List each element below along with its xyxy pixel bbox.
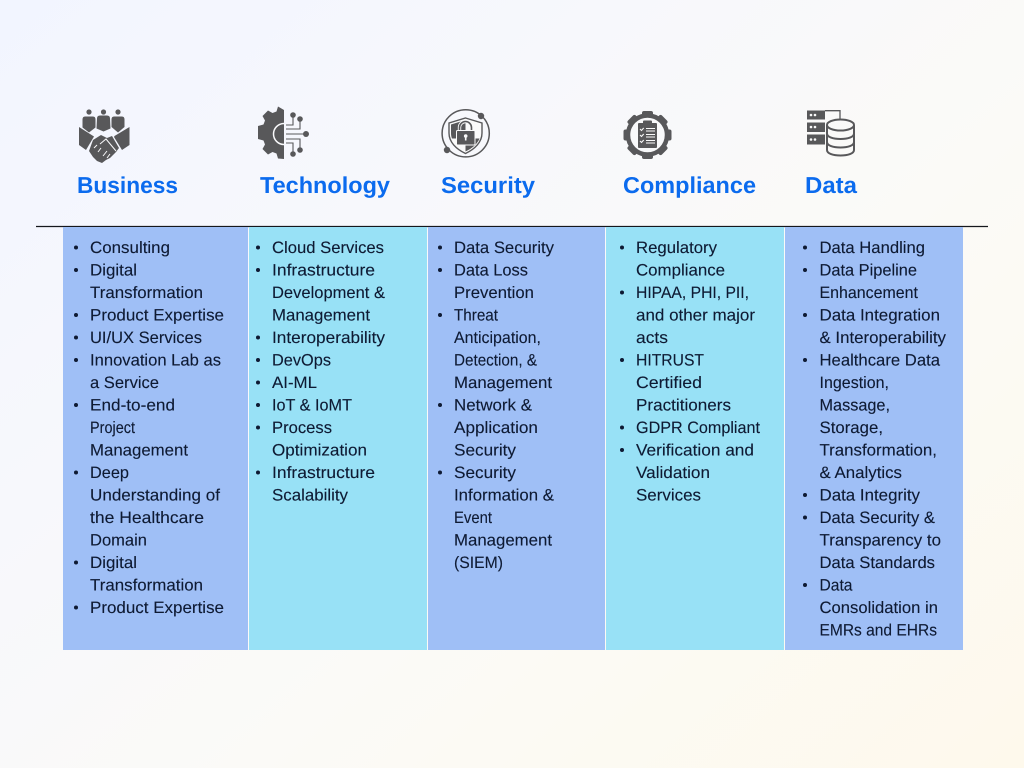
- heading: Compliance: Compliance: [623, 172, 756, 198]
- list: Business: Innovation Lab as: [90, 352, 221, 370]
- list: Compliance: and other major: [636, 306, 756, 324]
- icon: business handshake: [79, 109, 130, 163]
- list: Data: EMRs and EHRs: [820, 622, 937, 640]
- list: Security: Event: [454, 509, 492, 527]
- list: Compliance: HITRUST: [636, 352, 704, 370]
- list: Technology: Interoperability: [272, 329, 386, 347]
- icon: compliance gear with checklist: [624, 111, 672, 159]
- list: Business: Digital: [90, 554, 137, 572]
- list: Security: Network &: [454, 396, 532, 414]
- list: Technology: Management: [272, 306, 370, 324]
- list: Security: Application: [454, 419, 538, 437]
- icon: data servers and database: [807, 110, 854, 156]
- list: Business: [74, 239, 224, 617]
- list: Compliance: Services: [636, 486, 701, 504]
- list: Technology: Infrastructure: [272, 464, 375, 482]
- list: Business: Deep: [90, 464, 129, 482]
- heading: Security: Security: [441, 172, 535, 198]
- icon: security shield and lock: [442, 110, 489, 157]
- list: Data: Storage,: [820, 419, 883, 437]
- list: Business: Product Expertise: [90, 306, 224, 324]
- list: Technology: [256, 239, 386, 504]
- list: Business: Project: [90, 419, 135, 437]
- list: Compliance: HIPAA, PHI, PII,: [636, 284, 749, 302]
- panel: Data: [785, 110, 963, 650]
- heading: Technology: Technology: [260, 172, 390, 198]
- list: Business: Transformation: [90, 576, 203, 594]
- list: Security: Data Security: [454, 239, 555, 257]
- list: Security: Prevention: [454, 284, 534, 302]
- list: Data: Transparency to: [820, 532, 941, 550]
- list: Business: Understanding of: [90, 486, 220, 504]
- icon: technology gear with circuit: [258, 106, 309, 159]
- list: Data: Data Integrity: [820, 486, 921, 504]
- list: Security: Information &: [454, 486, 554, 504]
- list: Compliance: Certified: [636, 374, 702, 392]
- heading: Business: Business: [77, 172, 178, 198]
- list: Security: Anticipation,: [454, 329, 541, 347]
- panel: Technology: [249, 106, 427, 650]
- list: Security: Security: [454, 464, 517, 482]
- list: Data: [803, 239, 947, 640]
- list: Technology: Infrastructure: [272, 262, 375, 280]
- list: Business: the Healthcare: [90, 509, 204, 527]
- list: Data: Data Security &: [820, 509, 935, 527]
- list: Data: Transformation,: [820, 442, 937, 460]
- list: Compliance: Compliance: [636, 262, 725, 280]
- list: Business: End-to-end: [90, 396, 175, 414]
- list: Data: Ingestion,: [820, 374, 889, 392]
- list: Business: Transformation: [90, 284, 203, 302]
- list: Business: Domain: [90, 532, 147, 550]
- panel: Security: [428, 110, 605, 650]
- column: Business: [63, 227, 248, 650]
- list: Technology: Process: [272, 419, 332, 437]
- list: Technology: Cloud Services: [272, 239, 384, 257]
- list: Data: Massage,: [820, 396, 890, 414]
- list: Data: & Analytics: [820, 464, 902, 482]
- column: Security: [428, 227, 605, 650]
- list: Compliance: GDPR Compliant: [636, 419, 760, 437]
- list: Business: Consulting: [90, 239, 170, 257]
- list: Data: Data: [820, 576, 853, 594]
- list: Compliance: Practitioners: [636, 396, 731, 414]
- column: Compliance: [606, 227, 784, 650]
- list: Compliance: [620, 239, 760, 504]
- list: Business: Management: [90, 442, 188, 460]
- column: Data: [785, 227, 963, 650]
- list: Security: Security: [454, 442, 517, 460]
- list: Technology: AI-ML: [272, 374, 317, 392]
- panel: Business: [63, 109, 248, 650]
- heading: Data: Data: [805, 172, 857, 198]
- list: Business: UI/UX Services: [90, 329, 202, 347]
- list: Data: Data Handling: [820, 239, 925, 257]
- list: Data: Healthcare Data: [820, 352, 941, 370]
- list: Technology: Optimization: [272, 442, 367, 460]
- list: Security: Threat: [454, 306, 498, 324]
- list: Compliance: Validation: [636, 464, 710, 482]
- list: Compliance: Regulatory: [636, 239, 718, 257]
- list: Technology: IoT & IoMT: [272, 396, 352, 414]
- list: Data: Data Standards: [820, 554, 935, 572]
- list: Security: (SIEM): [454, 554, 503, 572]
- list: Security: Management: [454, 374, 552, 392]
- list: Technology: Scalability: [272, 486, 349, 504]
- list: Compliance: acts: [636, 329, 668, 347]
- list: Technology: DevOps: [272, 352, 331, 370]
- column: Technology: [249, 227, 427, 650]
- list: Technology: Development &: [272, 284, 385, 302]
- list: Business: Product Expertise: [90, 599, 224, 617]
- list: Security: Management: [454, 532, 552, 550]
- list: Data: Data Integration: [820, 306, 940, 324]
- list: Business: Digital: [90, 262, 137, 280]
- list: Business: a Service: [90, 374, 159, 392]
- panel: Compliance: [606, 111, 784, 650]
- list: Data: Enhancement: [820, 284, 918, 302]
- list: Security: [438, 239, 555, 572]
- list: Security: Data Loss: [454, 262, 528, 280]
- list: Data: Consolidation in: [820, 599, 938, 617]
- list: Data: & Interoperability: [820, 329, 947, 347]
- list: Security: Detection, &: [454, 352, 537, 370]
- list: Compliance: Verification and: [636, 442, 754, 460]
- list: Data: Data Pipeline: [820, 262, 917, 280]
